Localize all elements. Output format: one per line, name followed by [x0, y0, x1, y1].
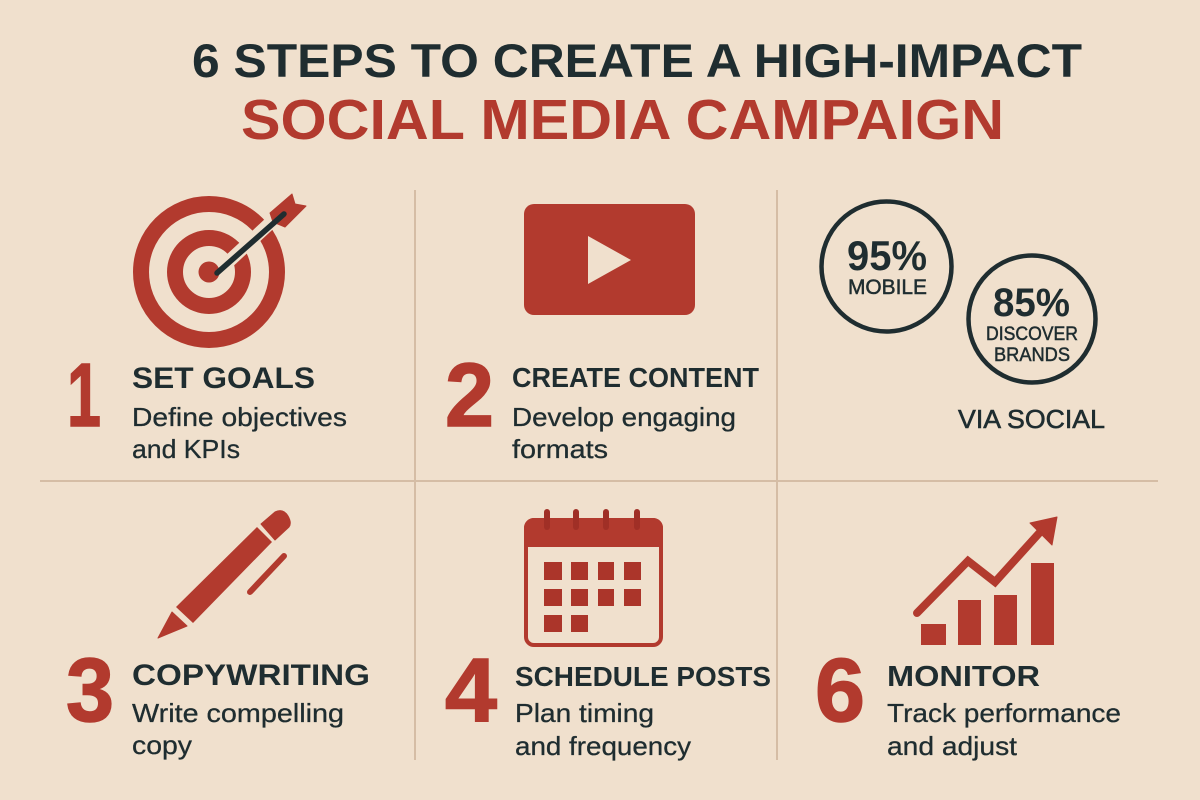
panel: statistics [822, 202, 1105, 434]
step number 4: 4 [445, 641, 497, 741]
panel: step 1 set goals [67, 194, 347, 464]
text: monitor description [887, 698, 1121, 761]
icon: target with arrow [141, 194, 306, 340]
stat: 85% discover brands: BRANDS [994, 345, 1070, 366]
title [192, 34, 1082, 152]
icon: growth chart [917, 517, 1057, 645]
stat: 85% discover brands: DISCOVER [986, 324, 1078, 345]
step number 2: 2 [445, 346, 494, 446]
text: schedule posts description [515, 698, 691, 761]
stat: 95% mobile: MOBILE [848, 276, 927, 299]
text: copywriting description: copy [132, 730, 192, 760]
text: set goals description: and KPIs [132, 434, 240, 464]
panel: step 2 create content [445, 204, 759, 464]
step number 6: 6 [815, 641, 865, 741]
text: schedule posts description: and frequency [515, 731, 691, 761]
stat: 85% discover brands: 85% [993, 281, 1070, 325]
text: schedule posts description: Plan timing [515, 698, 654, 728]
heading: set goals: SET GOALS [132, 362, 315, 395]
icon: calendar [524, 512, 663, 645]
text: monitor description: and adjust [887, 731, 1018, 761]
panel: step 4 schedule posts [445, 512, 771, 761]
stat: 95% mobile: 95% [847, 232, 927, 279]
heading: monitor: MONITOR [887, 661, 1040, 693]
text: monitor description: Track performance [887, 698, 1121, 728]
text: copywriting description: Write compelling [132, 698, 344, 728]
icon: pen [158, 511, 290, 638]
text: set goals description [132, 402, 347, 464]
heading: copywriting: COPYWRITING [132, 659, 370, 692]
title: SOCIAL MEDIA CAMPAIGN [241, 88, 1004, 152]
step number 1: 1 [67, 346, 101, 446]
text: via social: VIA SOCIAL [958, 404, 1105, 434]
panel: step 6 monitor [815, 517, 1121, 761]
text: set goals description: Define objectives [132, 402, 347, 432]
stat: 85% discover brands [968, 256, 1096, 382]
title: 6 STEPS TO CREATE A HIGH-IMPACT [192, 34, 1082, 87]
text: create content description: Develop engaging [512, 402, 736, 432]
step number 3: 3 [66, 641, 114, 741]
icon: video play [524, 204, 695, 315]
text: create content description [512, 402, 736, 464]
text: copywriting description [132, 698, 344, 760]
panel: step 3 copywriting [66, 511, 370, 760]
stat: 95% mobile [822, 202, 952, 332]
text: create content description: formats [512, 434, 608, 464]
heading: create content: CREATE CONTENT [512, 362, 759, 393]
heading: schedule posts: SCHEDULE POSTS [515, 661, 771, 692]
